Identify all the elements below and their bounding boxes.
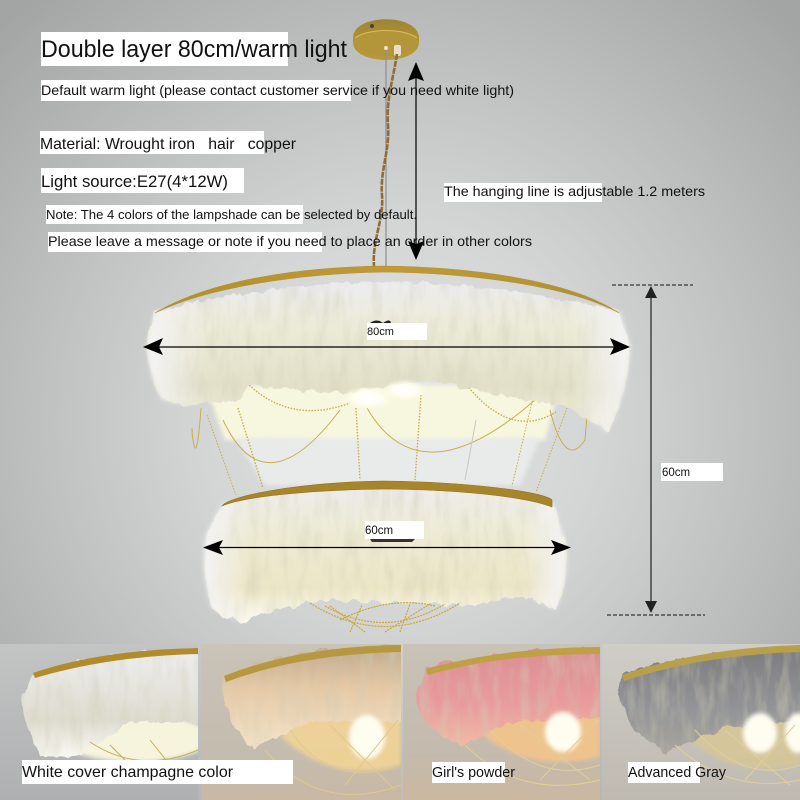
dimension: total height: 60cm — [662, 467, 690, 479]
swatch: pink — [403, 644, 602, 800]
dimension: lower diameter: 60cm — [365, 525, 393, 537]
order message note: Please leave a message or note if you need to place an order in other colors — [48, 233, 532, 249]
upper gold ring — [155, 266, 619, 313]
label: advanced gray: Advanced Gray — [628, 765, 727, 781]
hanging line label: The hanging line is adjustable 1.2 meters — [444, 183, 705, 199]
label: girl's powder: Girl's powder — [432, 765, 515, 781]
dimension: total height — [607, 285, 723, 615]
lampshade colour note: Note: The 4 colors of the lampshade can be selected by default. — [46, 208, 417, 222]
title: Double layer 80cm/warm light — [41, 36, 347, 63]
twisted cord — [374, 54, 397, 266]
material: Material: Wrought iron hair copper — [40, 136, 297, 153]
upper interior glow — [205, 385, 560, 442]
hanging wire — [385, 50, 387, 266]
support chains — [192, 383, 587, 495]
lower interior haze — [235, 438, 540, 485]
ceiling canopy — [353, 19, 419, 60]
bottom gold net — [310, 603, 460, 632]
arrow: hanging height — [408, 62, 424, 260]
lower gold ring — [222, 481, 552, 507]
swatch: champagne — [201, 644, 403, 800]
label: white cover champagne: White cover champagne color — [22, 764, 234, 781]
dimension: lower diameter — [203, 521, 571, 555]
upper feather shade — [148, 282, 630, 432]
swatch: white — [0, 644, 210, 800]
light source: Light source:E27(4*12W) — [41, 172, 228, 191]
dimension: upper diameter: 80cm — [367, 326, 394, 338]
warm light note: Default warm light (please contact customer service if you need white light) — [41, 82, 514, 98]
swatch: gray — [602, 644, 800, 800]
dimension: upper diameter — [143, 320, 630, 355]
label: white cover champagne — [22, 760, 293, 784]
lower feather shade — [204, 486, 566, 622]
